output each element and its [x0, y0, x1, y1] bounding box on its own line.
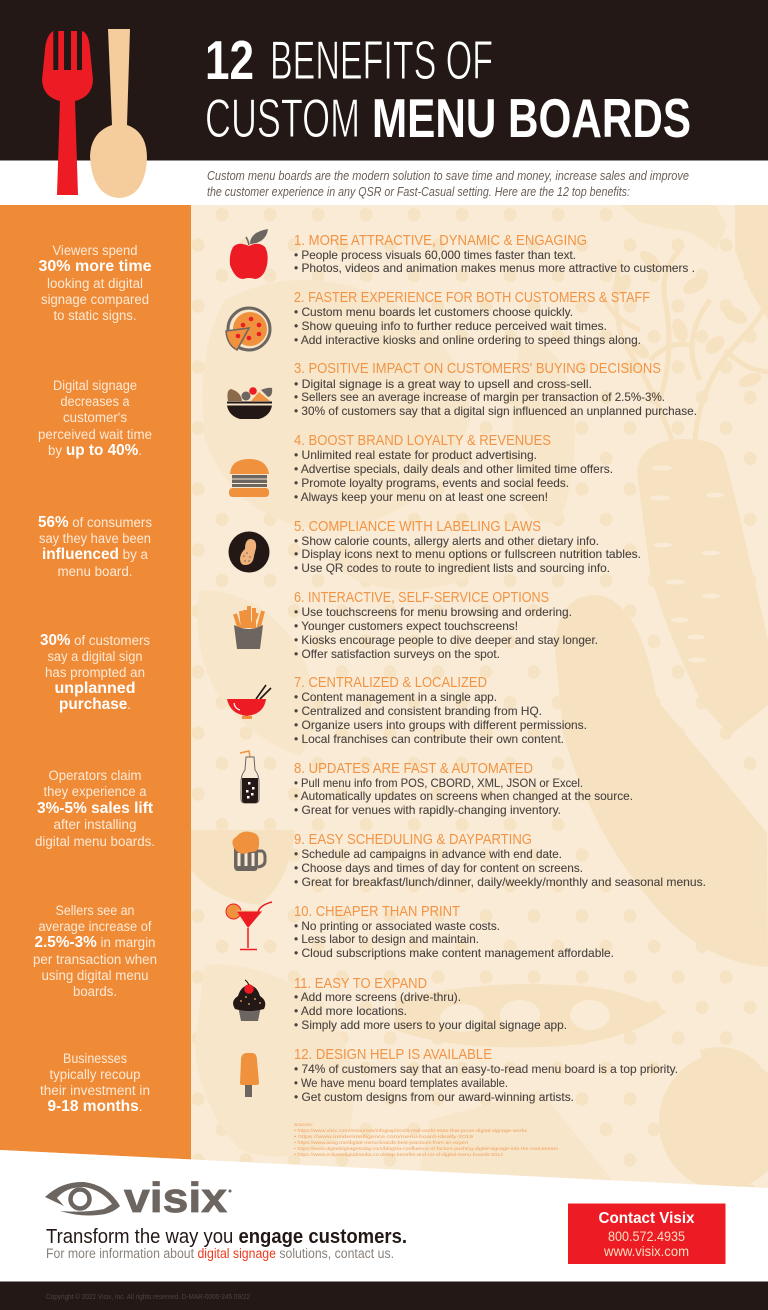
sources [294, 1122, 558, 1158]
contact box: Contact Visix [598, 1210, 695, 1227]
stat: 30% more time: looking at digital [47, 276, 143, 291]
logo: visix eye [45, 1174, 232, 1221]
stat: 30% more time: signage compared [41, 292, 149, 307]
benefit 7: • Organize users into groups with different permissions. [294, 718, 587, 732]
benefit 7: 7. CENTRALIZED & LOCALIZED [294, 675, 487, 691]
stat: unplanned purchase [40, 632, 150, 713]
sources: • https://www.visix.com/resources/infographics/5-real-world-stats-that-prove-digital-signage-works [294, 1128, 528, 1134]
benefit 11: 11. EASY TO EXPAND [294, 976, 427, 992]
benefit 5: • Display icons next to menu options or fullscreen nutrition tables. [294, 547, 641, 561]
benefit 12: • Get custom designs from our award-winning artists. [294, 1090, 574, 1104]
stat: 56% of consumers: 56% of consumers [38, 514, 152, 531]
stat: 30% more time: Viewers spend [52, 243, 138, 258]
stat: 30% more time: 30% more time [38, 258, 152, 275]
benefit 3 [294, 361, 697, 418]
stat: sales lift [35, 768, 155, 849]
contact box [568, 1204, 726, 1264]
benefit 1: • Photos, videos and animation makes menus more attractive to customers . [294, 261, 695, 275]
stat: unplanned purchase: say a digital sign [48, 649, 142, 664]
copyright: Copyright © 2022 Visix, Inc. All rights reserved. D-MAR-0000-245 09/22 [46, 1293, 250, 1301]
icon: salad bowl [227, 387, 272, 419]
icon: apple [230, 229, 268, 279]
icon: cupcake [233, 980, 265, 1021]
benefit 9 [294, 832, 706, 889]
left column statistics [33, 243, 157, 1115]
benefit 7: • Local franchises can contribute their own content. [294, 732, 564, 746]
benefit 12: • 74% of customers say that an easy-to-read menu board is a top priority. [294, 1062, 678, 1076]
stat: margin increase: average increase of [38, 919, 152, 934]
icon: spoon [90, 29, 147, 198]
stat: margin increase: using digital menu [42, 968, 148, 983]
icon: popsicle [240, 1053, 259, 1097]
stat: 56% of consumers: influenced by a [42, 546, 148, 563]
benefit 10: 10. CHEAPER THAN PRINT [294, 904, 460, 920]
benefit 1 [294, 233, 695, 275]
sources: Sources: [294, 1122, 313, 1128]
icon: peanut on black circle [228, 532, 270, 572]
intro text: Custom menu boards are the modern solution to save time and money, increase sales and improve [207, 168, 689, 183]
title: 12 [205, 29, 254, 91]
benefit 10: • Cloud subscriptions make content management affordable. [294, 946, 614, 960]
benefit 5 [294, 519, 641, 575]
stat: sales lift: Operators claim [48, 768, 142, 783]
benefit 2: 2. FASTER EXPERIENCE FOR BOTH CUSTOMERS & STAFF [294, 290, 650, 306]
stat: margin increase: boards. [73, 984, 117, 999]
icon: beer mug [232, 832, 265, 871]
benefit 6 [294, 590, 598, 661]
benefit 5: • Show calorie counts, allergy alerts and other dietary info. [294, 534, 599, 548]
benefit 6: • Kiosks encourage people to dive deeper and stay longer. [294, 633, 598, 647]
benefit 9: • Choose days and times of day for content on screens. [294, 861, 583, 875]
benefit 3: • Digital signage is a great way to upsell and cross-sell. [294, 377, 592, 391]
benefit 9: 9. EASY SCHEDULING & DAYPARTING [294, 832, 532, 848]
sources: • https://www.eclipsedigitalmedia.co.uk/top-benefits-and-roi-of-digital-menu-boards-2014 [294, 1152, 503, 1158]
sources: • https://www.digitalsignagetoday.com/blogs/a-confluence-of-factors-pushing-digital-signage-into-the-mainstream [294, 1146, 558, 1152]
contact box: 800.572.4935 [608, 1228, 685, 1244]
sources: • https://www.insiderintelligence.com/menu-board-ideally-2019 [294, 1134, 473, 1140]
benefit 7 [294, 675, 587, 746]
benefit 11: • Add more locations. [294, 1004, 407, 1018]
benefit 12: 12. DESIGN HELP IS AVAILABLE [294, 1047, 492, 1063]
icon: pizza [226, 308, 270, 350]
benefit 4: • Advertise specials, daily deals and other limited time offers. [294, 462, 613, 476]
benefit 8 [294, 761, 633, 817]
stat: recoup investment: 9-18 months. [48, 1098, 142, 1115]
benefit 10 [294, 904, 614, 960]
benefit 12 [294, 1047, 678, 1104]
benefit 11 [294, 976, 567, 1032]
stat: margin increase [33, 903, 157, 999]
benefit 3: • 30% of customers say that a digital sign influenced an unplanned purchase. [294, 404, 697, 418]
benefit 3: 3. POSITIVE IMPACT ON CUSTOMERS' BUYING DECISIONS [294, 361, 661, 377]
benefit 2: • Show queuing info to further reduce perceived wait times. [294, 319, 607, 333]
benefit 11: • Add more screens (drive-thru). [294, 990, 461, 1004]
stat: sales lift: they experience a [44, 784, 147, 799]
benefit 7: • Content management in a single app. [294, 690, 497, 704]
benefit 8: • Great for venues with rapidly-changing inventory. [294, 803, 561, 817]
stat: 30% more time: to static signs. [54, 308, 136, 323]
stat: 56% of consumers [38, 514, 152, 579]
stat: sales lift: after installing [54, 817, 136, 832]
contact sentence: For more information about digital signage solutions, contact us. [46, 1246, 394, 1261]
benefit 4: 4. BOOST BRAND LOYALTY & REVENUES [294, 433, 551, 449]
title: BENEFITS OF [270, 29, 493, 91]
intro text: the customer experience in any QSR or Fast-Casual setting. Here are the 12 top benefits: [207, 184, 630, 199]
benefit 6: 6. INTERACTIVE, SELF-SERVICE OPTIONS [294, 590, 549, 606]
stat: up to 40%: decreases a [60, 394, 130, 409]
stat: up to 40%: customer's [63, 410, 127, 425]
tagline: Transform the way you engage customers. [46, 1226, 407, 1248]
stat: unplanned purchase: purchase. [59, 696, 131, 713]
benefit 6: • Younger customers expect touchscreens! [294, 619, 518, 633]
icon: fork [42, 31, 93, 195]
stat: recoup investment: typically recoup [50, 1067, 140, 1082]
stat: recoup investment [40, 1051, 150, 1115]
stat: 56% of consumers: say they have been [39, 531, 151, 546]
stat: up to 40%: Digital signage [53, 378, 137, 393]
benefit 5: 5. COMPLIANCE WITH LABELING LAWS [294, 519, 541, 535]
stat: margin increase: per transaction when [33, 952, 157, 967]
stat: up to 40%: by up to 40%. [48, 442, 142, 459]
icon: cocktail [226, 902, 272, 950]
benefit 8: • Pull menu info from POS, CBORD, XML, JSON or Excel. [294, 776, 583, 790]
stat: sales lift: 3%-5% sales lift [37, 800, 153, 817]
icon: cola bottle [240, 751, 259, 803]
logo: visix eye: visix [124, 1174, 228, 1221]
benefit 4 [294, 433, 613, 504]
stat: recoup investment: their investment in [40, 1083, 150, 1098]
benefit 6: • Use touchscreens for menu browsing and ordering. [294, 605, 572, 619]
contact box: www.visix.com [603, 1243, 689, 1259]
benefit 8: • Automatically updates on screens when changed at the source. [294, 789, 633, 803]
benefit 7: • Centralized and consistent branding from HQ. [294, 704, 542, 718]
benefit 4: • Always keep your menu on at least one screen! [294, 490, 548, 504]
benefit 6: • Offer satisfaction surveys on the spot. [294, 647, 500, 661]
benefit 5: • Use QR codes to route to ingredient lists and sourcing info. [294, 561, 610, 575]
title: CUSTOM [205, 87, 360, 149]
intro text [207, 168, 689, 199]
stat: up to 40%: perceived wait time [38, 427, 152, 442]
benefit 2 [294, 290, 650, 347]
benefit 8: 8. UPDATES ARE FAST & AUTOMATED [294, 761, 533, 777]
stat: sales lift: digital menu boards. [35, 834, 155, 849]
benefit 9: • Schedule ad campaigns in advance with end date. [294, 847, 562, 861]
stat: recoup investment: Businesses [63, 1051, 127, 1066]
benefit 4: • Promote loyalty programs, events and social feeds. [294, 476, 569, 490]
icon: noodle bowl [227, 685, 271, 719]
benefit 3: • Sellers see an average increase of margin per transaction of 2.5%-3%. [294, 390, 665, 404]
stat: unplanned purchase: unplanned [54, 680, 136, 697]
benefit 10: • No printing or associated waste costs. [294, 919, 500, 933]
footer band [0, 1282, 768, 1310]
benefit 11: • Simply add more users to your digital signage app. [294, 1018, 567, 1032]
stat: 56% of consumers: menu board. [58, 564, 132, 579]
stat: margin increase: 2.5%-3% in margin [34, 934, 156, 951]
benefit 2: • Add interactive kiosks and online ordering to speed things along. [294, 333, 641, 347]
sources: • https://www.asag.me/digital-menu-boards-best-practices-from-an-expert [294, 1140, 469, 1146]
stat: up to 40% [38, 378, 152, 459]
stat: unplanned purchase: 30% of customers [40, 632, 150, 649]
icon: fries [234, 606, 263, 649]
benefit 12: • We have menu board templates available. [294, 1076, 508, 1090]
stat: margin increase: Sellers see an [56, 903, 134, 918]
panel: cream background with vegetable pattern [191, 205, 768, 1190]
panel: header band [0, 0, 768, 160]
panel: left orange column [0, 205, 191, 1160]
benefit 9: • Great for breakfast/lunch/dinner, daily/weekly/monthly and seasonal menus. [294, 875, 706, 889]
benefit 10: • Less labor to design and maintain. [294, 932, 479, 946]
title [205, 29, 691, 149]
benefit 1: • People process visuals 60,000 times faster than text. [294, 248, 576, 262]
benefit 4: • Unlimited real estate for product advertising. [294, 448, 537, 462]
benefit 2: • Custom menu boards let customers choose quickly. [294, 305, 573, 319]
icon: burger [229, 459, 269, 497]
white slanted divider [0, 1150, 768, 1282]
benefit 1: 1. MORE ATTRACTIVE, DYNAMIC & ENGAGING [294, 233, 587, 249]
stat: 30% more time [38, 243, 152, 323]
stat: unplanned purchase: has prompted an [45, 665, 145, 680]
